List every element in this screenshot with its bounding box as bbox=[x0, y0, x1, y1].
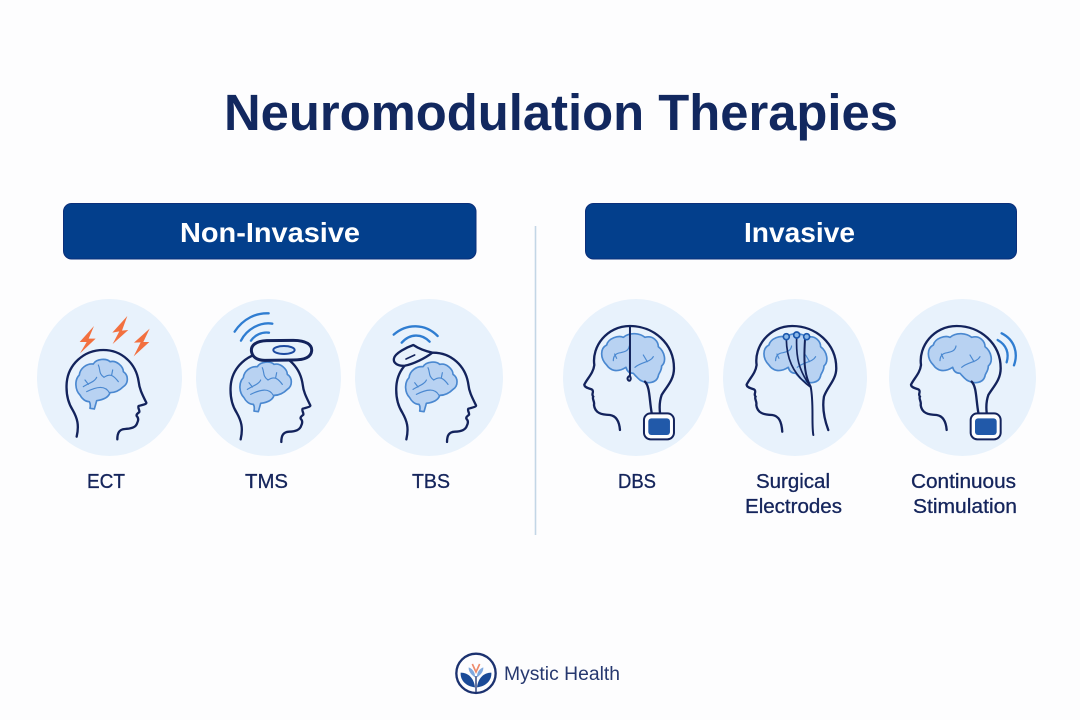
label: Surgical Electrodes: Electrodes bbox=[745, 496, 842, 518]
label: TMS: TMS bbox=[245, 471, 288, 493]
label: ECT: ECT bbox=[87, 471, 125, 493]
therapy: DBS bbox=[563, 299, 709, 493]
logo text: Mystic Health bbox=[504, 664, 620, 685]
label: Continuous Stimulation bbox=[911, 471, 1017, 518]
label: Surgical Electrodes bbox=[745, 471, 842, 518]
therapy: Surgical Electrodes bbox=[723, 299, 867, 518]
divider bbox=[534, 226, 536, 535]
icon: ECT head with lightning bbox=[37, 299, 182, 456]
logo: Mystic Health bbox=[456, 654, 620, 693]
header: Invasive bbox=[586, 204, 1016, 259]
icon: DBS head with implant bbox=[563, 299, 709, 456]
label: Continuous Stimulation: Continuous bbox=[911, 471, 1016, 493]
therapy: ECT bbox=[37, 299, 182, 493]
label: Continuous Stimulation: Stimulation bbox=[913, 496, 1017, 518]
therapy: TMS bbox=[196, 299, 341, 493]
icon: lotus in circle bbox=[456, 654, 496, 693]
label: DBS: DBS bbox=[618, 471, 656, 493]
icon: surgical electrodes head bbox=[723, 299, 867, 456]
therapy: TBS bbox=[355, 299, 503, 493]
icon: TMS head with coil bbox=[196, 299, 341, 456]
header: Non-Invasive: Non-Invasive bbox=[180, 217, 360, 248]
header: Invasive: Invasive bbox=[744, 217, 855, 248]
header: Non-Invasive bbox=[64, 204, 476, 259]
therapy: Continuous Stimulation bbox=[889, 299, 1036, 518]
icon: TBS head with coil bbox=[355, 299, 503, 456]
title: Neuromodulation Therapies bbox=[224, 84, 898, 141]
icon: continuous stimulation head bbox=[889, 299, 1036, 456]
label: Surgical Electrodes: Surgical bbox=[756, 471, 830, 493]
label: TBS: TBS bbox=[412, 471, 450, 493]
